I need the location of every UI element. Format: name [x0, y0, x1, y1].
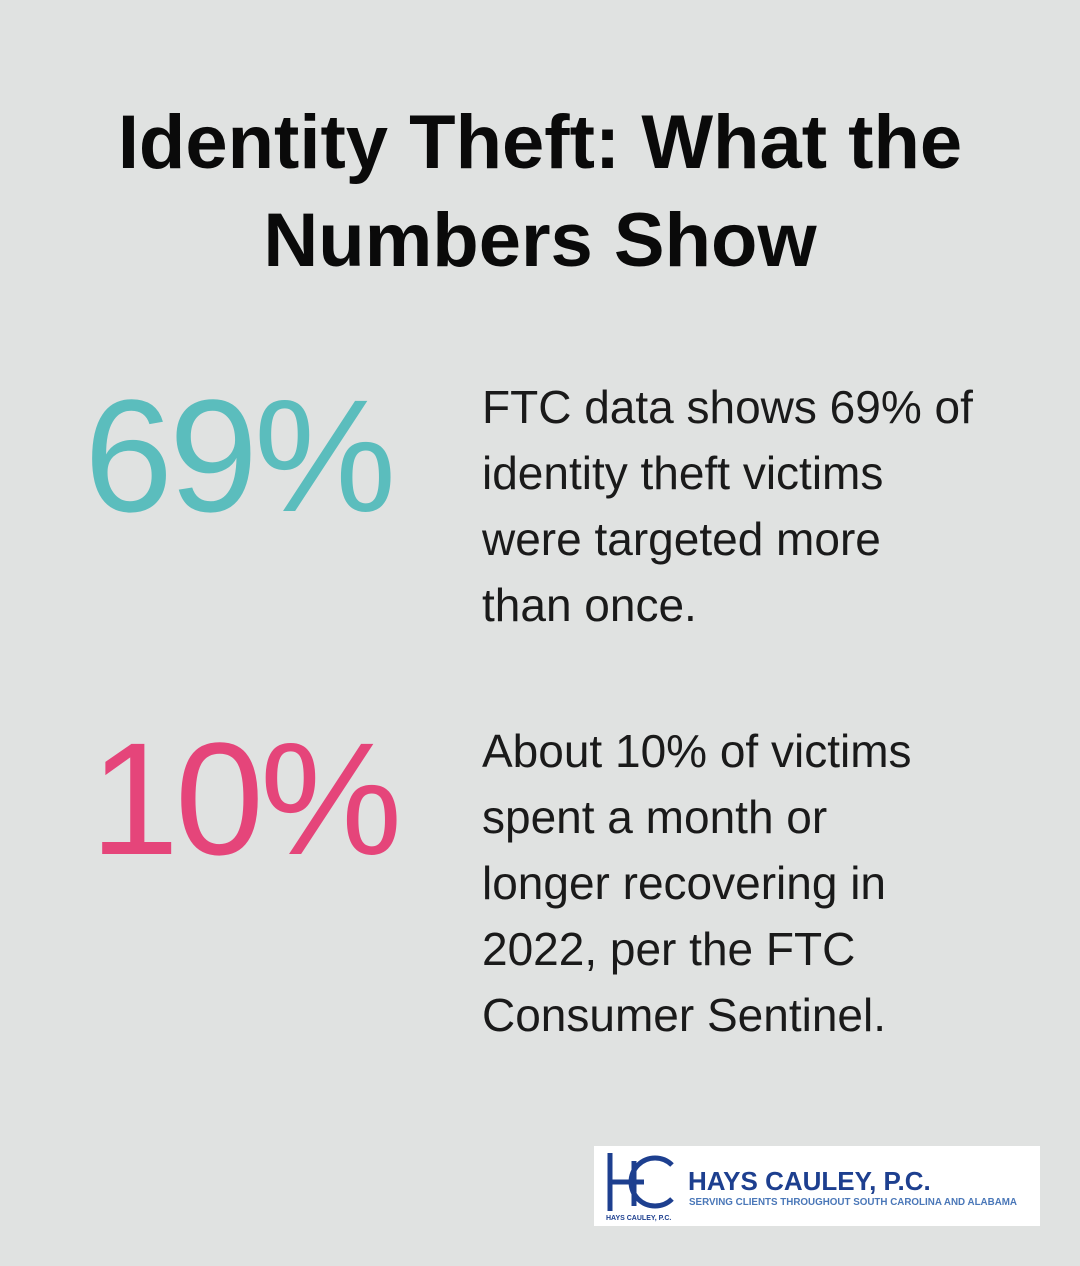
text: 10% description [482, 725, 912, 1041]
text: 10% description: Consumer Sentinel. [482, 989, 886, 1041]
text: 69% description: FTC data shows 69% of [482, 381, 973, 433]
text: 69% description: than once. [482, 579, 697, 631]
logo name: HAYS CAULEY, P.C. [688, 1166, 931, 1196]
text: 69% description: identity theft victims [482, 447, 883, 499]
logo tagline: SERVING CLIENTS THROUGHOUT SOUTH CAROLINA AND ALABAMA [689, 1197, 1017, 1208]
logo small caption: HAYS CAULEY, P.C. [606, 1215, 671, 1222]
title: Identity Theft: What the [118, 100, 962, 185]
text: 69% description: were targeted more [482, 513, 881, 565]
stat: 10%: 10% [90, 709, 398, 888]
title [118, 100, 962, 283]
text: 10% description: About 10% of victims [482, 725, 912, 777]
stat: 69%: 69% [84, 366, 392, 545]
icon: HC monogram [608, 1153, 674, 1211]
text: 10% description: spent a month or [482, 791, 827, 843]
text: 10% description: longer recovering in [482, 857, 886, 909]
text: 69% description [482, 381, 973, 631]
logo: Hays Cauley [594, 1146, 1040, 1226]
text: 10% description: 2022, per the FTC [482, 923, 855, 975]
title: Numbers Show [263, 198, 817, 283]
